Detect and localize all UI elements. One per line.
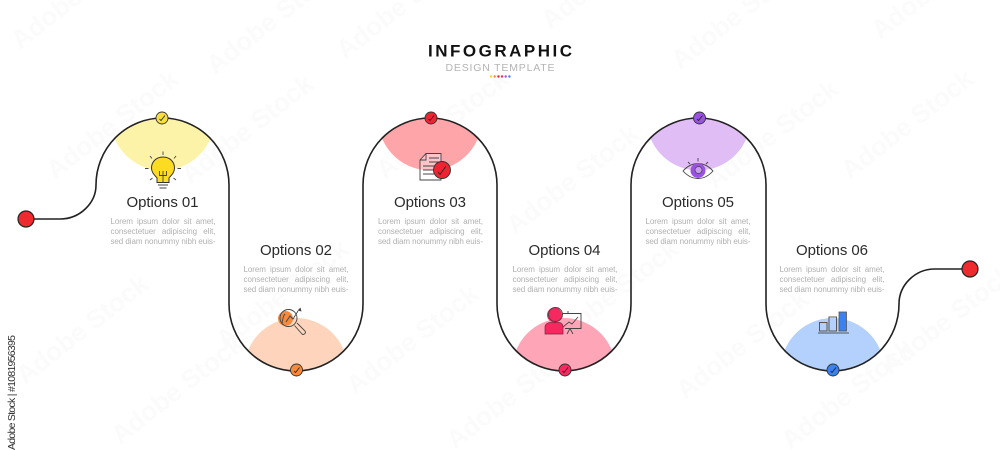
option 3 text: sed diam nonummy nibh euis- [378, 237, 483, 246]
winding path line [26, 118, 970, 371]
tinted cap: option 3 [382, 118, 478, 170]
option 5 text: sed diam nonummy nibh euis- [646, 237, 751, 246]
option 5 text: Options 05 [662, 194, 734, 211]
option 6 text: Lorem ipsum dolor sit amet, [780, 265, 884, 274]
stock id vertical text: Adobe Stock | #1081956395 [6, 335, 18, 450]
watermark pattern: Adobe Stock [700, 73, 844, 195]
marker: option 1 [156, 112, 168, 124]
marker: option 6 [827, 364, 839, 376]
option 4 text [512, 242, 618, 294]
marker: option 2 [290, 364, 302, 376]
watermark pattern: Adobe Stock [210, 233, 354, 355]
icon: presenter and chart board [545, 308, 581, 334]
watermark pattern: Adobe Stock [40, 63, 184, 185]
icon: magnifier with chart [278, 308, 305, 334]
option 2 text: sed diam nonummy nibh euis- [244, 285, 349, 294]
option 6 text [780, 242, 885, 294]
title: INFOGRAPHIC [428, 42, 572, 60]
watermark pattern: Adobe Stock [175, 68, 319, 190]
option 1 text [110, 194, 216, 246]
tinted cap: option 1 [114, 118, 210, 170]
watermark pattern: Adobe Stock [500, 118, 644, 240]
path end dot [962, 261, 978, 277]
tinted cap: option 5 [650, 118, 746, 170]
option 2 text: Options 02 [260, 242, 332, 259]
watermark pattern: Adobe Stock [540, 233, 684, 355]
option 2 text: consectetuer adipiscing elit, [244, 275, 348, 284]
icon: light bulb [145, 152, 181, 188]
option 1 text: Lorem ipsum dolor sit amet, [110, 217, 216, 226]
watermark pattern: Adobe Stock [105, 328, 249, 450]
option 4 text: sed diam nonummy nibh euis- [512, 285, 618, 294]
tinted cap: option 2 [248, 318, 344, 371]
option 6 text: sed diam nonummy nibh euis- [780, 285, 885, 294]
watermark pattern: Adobe Stock [340, 278, 484, 400]
marker: option 5 [694, 112, 706, 124]
option 5 text [646, 194, 751, 246]
tinted cap: option 4 [516, 318, 612, 371]
subtitle: DESIGN TEMPLATE [446, 62, 554, 74]
title colour dots [490, 75, 511, 78]
marker: option 3 [425, 112, 437, 124]
watermark pattern: Adobe Stock [670, 283, 814, 405]
option 1 text: Options 01 [126, 194, 198, 211]
watermark pattern: Adobe Stock [10, 268, 154, 390]
option 3 text: Lorem ipsum dolor sit amet, [378, 217, 483, 226]
option 4 text: Lorem ipsum dolor sit amet, [512, 265, 618, 274]
watermark pattern: Adobe Stock [835, 63, 979, 185]
option 3 text: Options 03 [394, 194, 466, 211]
watermark pattern: Adobe Stock [370, 63, 514, 185]
option 4 text: Options 04 [528, 242, 600, 259]
option 3 text [378, 194, 483, 246]
option 4 text: consectetuer adipiscing elit, [512, 275, 618, 284]
path start dot [18, 211, 34, 227]
option 1 text: consectetuer adipiscing elit, [110, 227, 216, 236]
icon: bar chart [818, 312, 849, 333]
icon: document with check badge [420, 154, 450, 180]
marker: option 4 [559, 364, 571, 376]
option 5 text: Lorem ipsum dolor sit amet, [646, 217, 750, 226]
tinted cap: option 6 [784, 318, 880, 371]
option 2 text: Lorem ipsum dolor sit amet, [244, 265, 348, 274]
option 6 text: consectetuer adipiscing elit, [780, 275, 884, 284]
option 6 text: Options 06 [796, 242, 868, 259]
option 5 text: consectetuer adipiscing elit, [646, 227, 750, 236]
icon: eye [683, 158, 713, 178]
option 1 text: sed diam nonummy nibh euis- [110, 237, 216, 246]
option 2 text [244, 242, 349, 294]
option 3 text: consectetuer adipiscing elit, [378, 227, 483, 236]
